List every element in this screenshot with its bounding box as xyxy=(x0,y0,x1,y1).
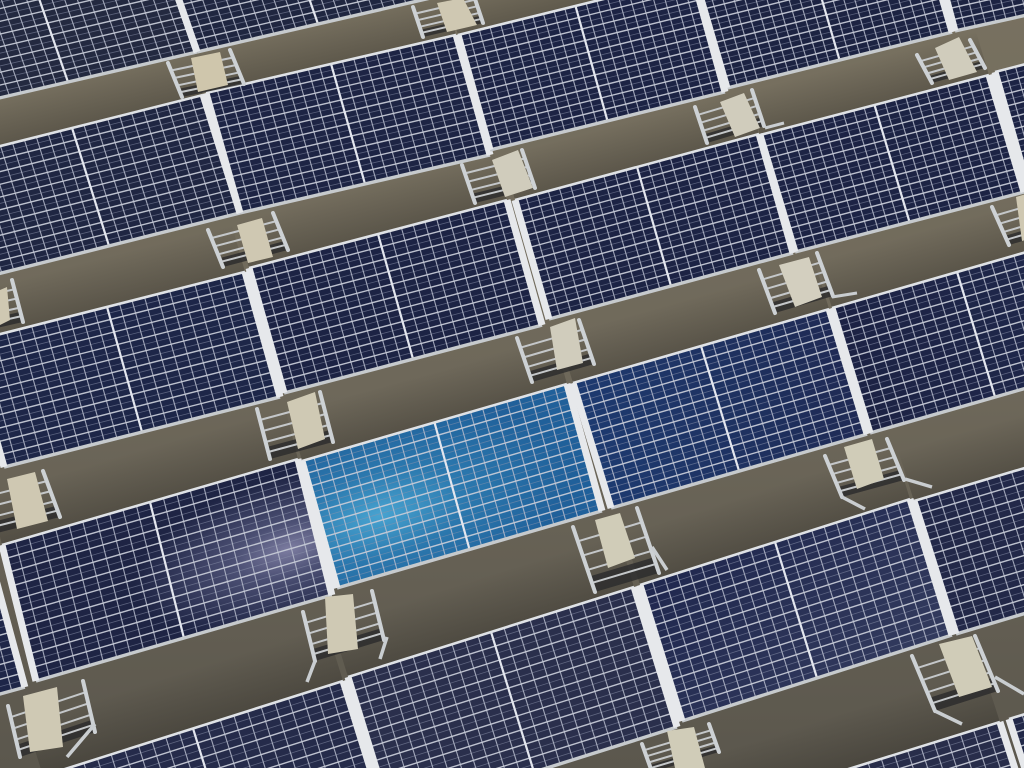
panel: fifth row far right xyxy=(914,421,1024,634)
panel: fourth row right xyxy=(573,309,867,508)
bracket: right edge xyxy=(992,190,1024,245)
panel: bottom right corner xyxy=(1009,629,1024,768)
bracket: row two centre xyxy=(462,150,535,203)
solar panels, second row xyxy=(0,0,725,279)
bracket: left edge upper xyxy=(0,280,23,336)
bracket: left edge middle xyxy=(0,471,60,533)
bracket: top left xyxy=(168,50,244,97)
panel: fourth row left with sheen xyxy=(2,459,332,681)
panel: third row left xyxy=(0,272,280,467)
panel: bottom row left xyxy=(43,681,388,768)
panel: bottom right xyxy=(710,722,1024,768)
panel: fourth row left sliver xyxy=(0,550,25,767)
bracket: below highlighted panel xyxy=(573,508,667,592)
bracket: lower centre left xyxy=(303,591,387,682)
bracket: above highlighted panel xyxy=(257,392,333,459)
bracket: row two right xyxy=(695,90,784,143)
bracket: top right xyxy=(917,37,985,83)
bracket: row three right xyxy=(759,253,857,313)
solar panels, third row xyxy=(0,14,1024,467)
panel: second row left xyxy=(0,95,240,279)
panel: top row centre xyxy=(156,0,439,52)
bracket: row three centre xyxy=(517,318,594,382)
panel: top row left xyxy=(0,0,197,112)
panel: third row right xyxy=(515,134,793,319)
panel: third row centre xyxy=(249,200,542,393)
solar panels, fourth row xyxy=(0,236,1024,767)
bracket: lower right xyxy=(912,636,1024,724)
panel: second row centre xyxy=(206,35,490,213)
panel: highlighted blue reflection xyxy=(302,384,602,588)
bracket: top centre xyxy=(413,0,483,37)
solar panels, top row xyxy=(0,0,1024,112)
panel: fourth row far right xyxy=(832,236,1024,433)
bracket: right of centre xyxy=(825,439,932,509)
panel: second row right xyxy=(458,0,725,150)
panel: top row centre right xyxy=(694,0,952,88)
bracket: row two left xyxy=(208,213,288,267)
panel: third row far right xyxy=(760,75,1024,252)
bracket: lower left xyxy=(8,681,95,757)
panel: fifth row centre xyxy=(348,587,677,768)
panel: fifth row right xyxy=(640,499,952,721)
panel: third row edge xyxy=(995,14,1024,187)
panel: top row far right xyxy=(925,0,1024,31)
bracket: bottom centre xyxy=(642,724,719,768)
solar panels, fifth row xyxy=(43,421,1024,768)
